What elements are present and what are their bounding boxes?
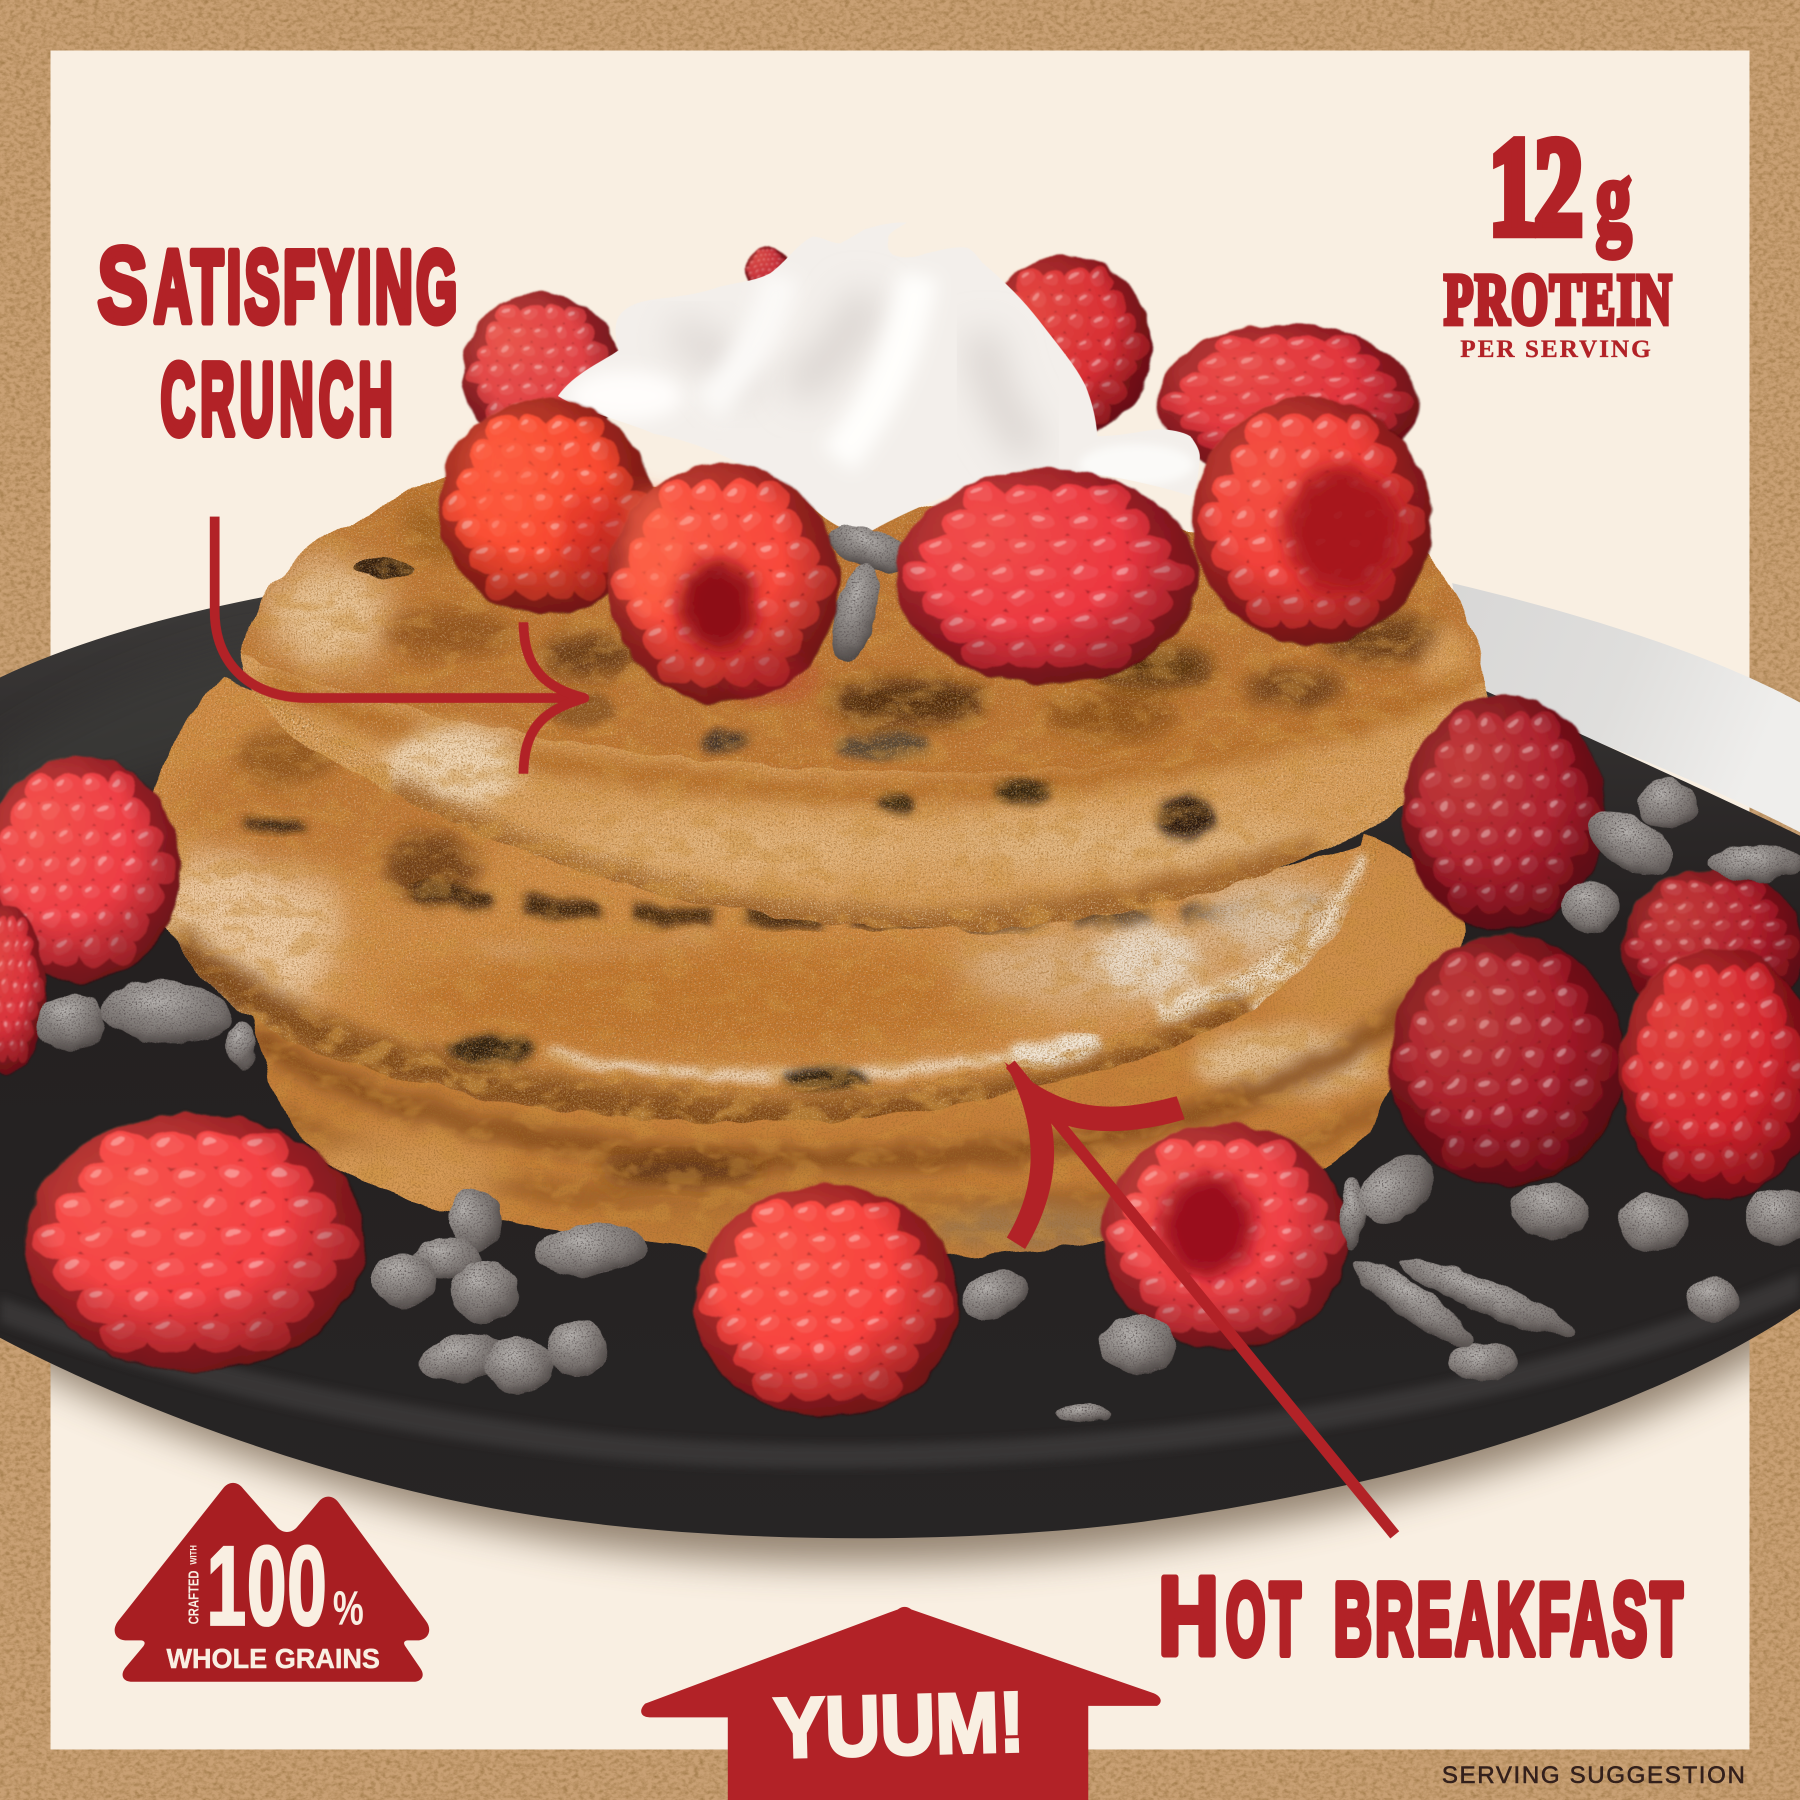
- scattered chocolate chips: [37, 778, 1800, 1422]
- toasted speckle: middle waffle: [138, 666, 1389, 1136]
- raspberries on plate: [0, 695, 1800, 1418]
- YUUM up arrow: [641, 1607, 1161, 1800]
- toasted speckle: bottom waffle: [230, 827, 1481, 1274]
- satisfying crunch heading: [98, 226, 457, 456]
- hot breakfast heading: OT: [1226, 1563, 1301, 1676]
- satisfying crunch heading: CRUNCH: [161, 343, 393, 456]
- hot breakfast heading: BREAKFAST: [1334, 1564, 1683, 1677]
- badge: 100% whole grains: %: [333, 1581, 364, 1635]
- middle waffle: [138, 666, 1389, 1136]
- white napkin behind plate: [1452, 583, 1800, 832]
- badge: 100% whole grains: WITH: [188, 1545, 198, 1565]
- plate shadow: [50, 1340, 1750, 1589]
- chocolate chips on waffle: [822, 515, 918, 668]
- bottom waffle: [230, 827, 1481, 1274]
- 12g protein stat: 12: [1489, 109, 1583, 263]
- 12g protein stat: [1444, 109, 1671, 363]
- YUUM up arrow: YUUM!: [773, 1674, 1026, 1775]
- front raspberries on top: [437, 396, 1432, 703]
- satisfying crunch heading: ATISFYING: [154, 231, 457, 344]
- serving suggestion note: SERVING SUGGESTION: [1442, 1762, 1745, 1789]
- arrow to hot breakfast: [1004, 1062, 1395, 1535]
- arrow to crunch: [215, 517, 584, 774]
- badge: 100% whole grains: WHOLE GRAINS: [166, 1643, 380, 1674]
- badge: 100% whole grains: CRAFTED: [186, 1570, 203, 1624]
- badge: 100% whole grains: 100: [207, 1523, 327, 1648]
- 12g protein stat: PER SERVING: [1460, 335, 1651, 363]
- top waffle: [230, 459, 1492, 941]
- toasted speckle: top waffle: [230, 459, 1492, 941]
- waffle stack: [138, 459, 1492, 1274]
- hot breakfast heading: [1158, 1554, 1683, 1678]
- badge: 100% whole grains: [115, 1483, 429, 1682]
- hot breakfast heading: H: [1158, 1554, 1219, 1678]
- 12g protein stat: g: [1596, 137, 1632, 258]
- black plate: [0, 595, 1800, 1538]
- satisfying crunch heading: S: [98, 226, 148, 344]
- whipped cream: [551, 218, 1205, 551]
- food photo: waffles on a plate: [0, 218, 1800, 1564]
- back raspberries: [462, 244, 1419, 480]
- 12g protein stat: PROTEIN: [1444, 260, 1671, 340]
